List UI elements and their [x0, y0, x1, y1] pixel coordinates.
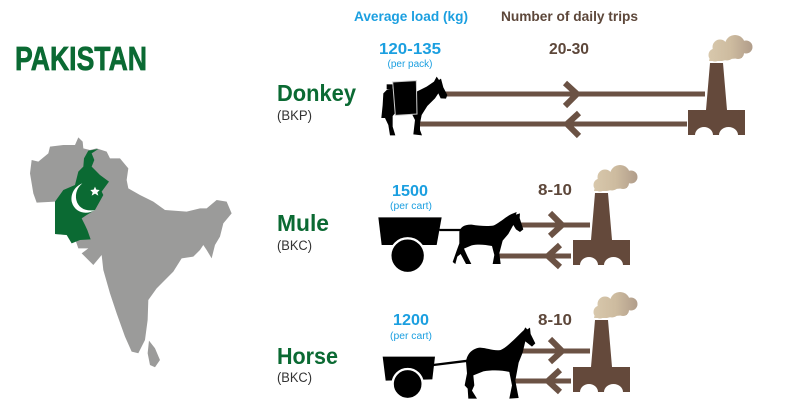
arrows: mule trips	[498, 213, 590, 267]
label: Donkey: Donkey	[277, 80, 356, 106]
value: mule trips: 8-10	[538, 182, 572, 199]
value: mule load: 1500	[392, 183, 428, 200]
column heading: daily trips: Number of daily trips	[501, 8, 638, 24]
value: donkey load: 120-135	[379, 41, 441, 58]
label: Mule: Mule	[277, 210, 329, 236]
icon: donkey with pack	[381, 77, 447, 135]
icon: crescent	[71, 183, 95, 213]
region: Pakistan flag	[55, 149, 109, 243]
icon: mule and cart	[378, 212, 523, 273]
title: PAKISTAN	[15, 40, 147, 77]
label: Horse: Horse	[277, 343, 338, 369]
arrows: horse trips	[514, 339, 590, 392]
region: South Asia landmass	[30, 137, 232, 367]
icon: horse and cart	[383, 327, 535, 399]
icon: star	[90, 187, 100, 196]
arrows: donkey trips	[420, 83, 705, 136]
label: BKC mule: (BKC)	[277, 238, 312, 253]
note: per pack: (per pack)	[388, 59, 432, 70]
label: BKP: (BKP)	[277, 108, 312, 123]
icon: factory, donkey row	[688, 35, 752, 135]
icon: factory, horse row	[573, 292, 638, 392]
label: BKC horse: (BKC)	[277, 370, 312, 385]
note: per cart, horse: (per cart)	[390, 331, 432, 342]
note: per cart, mule: (per cart)	[390, 201, 432, 212]
value: horse load: 1200	[393, 312, 429, 329]
map: South Asia with Pakistan highlighted	[30, 137, 232, 367]
column heading: average load: Average load (kg)	[354, 8, 468, 24]
value: horse trips: 8-10	[538, 312, 572, 329]
icon: factory, mule row	[573, 165, 638, 265]
value: donkey trips: 20-30	[549, 41, 589, 58]
